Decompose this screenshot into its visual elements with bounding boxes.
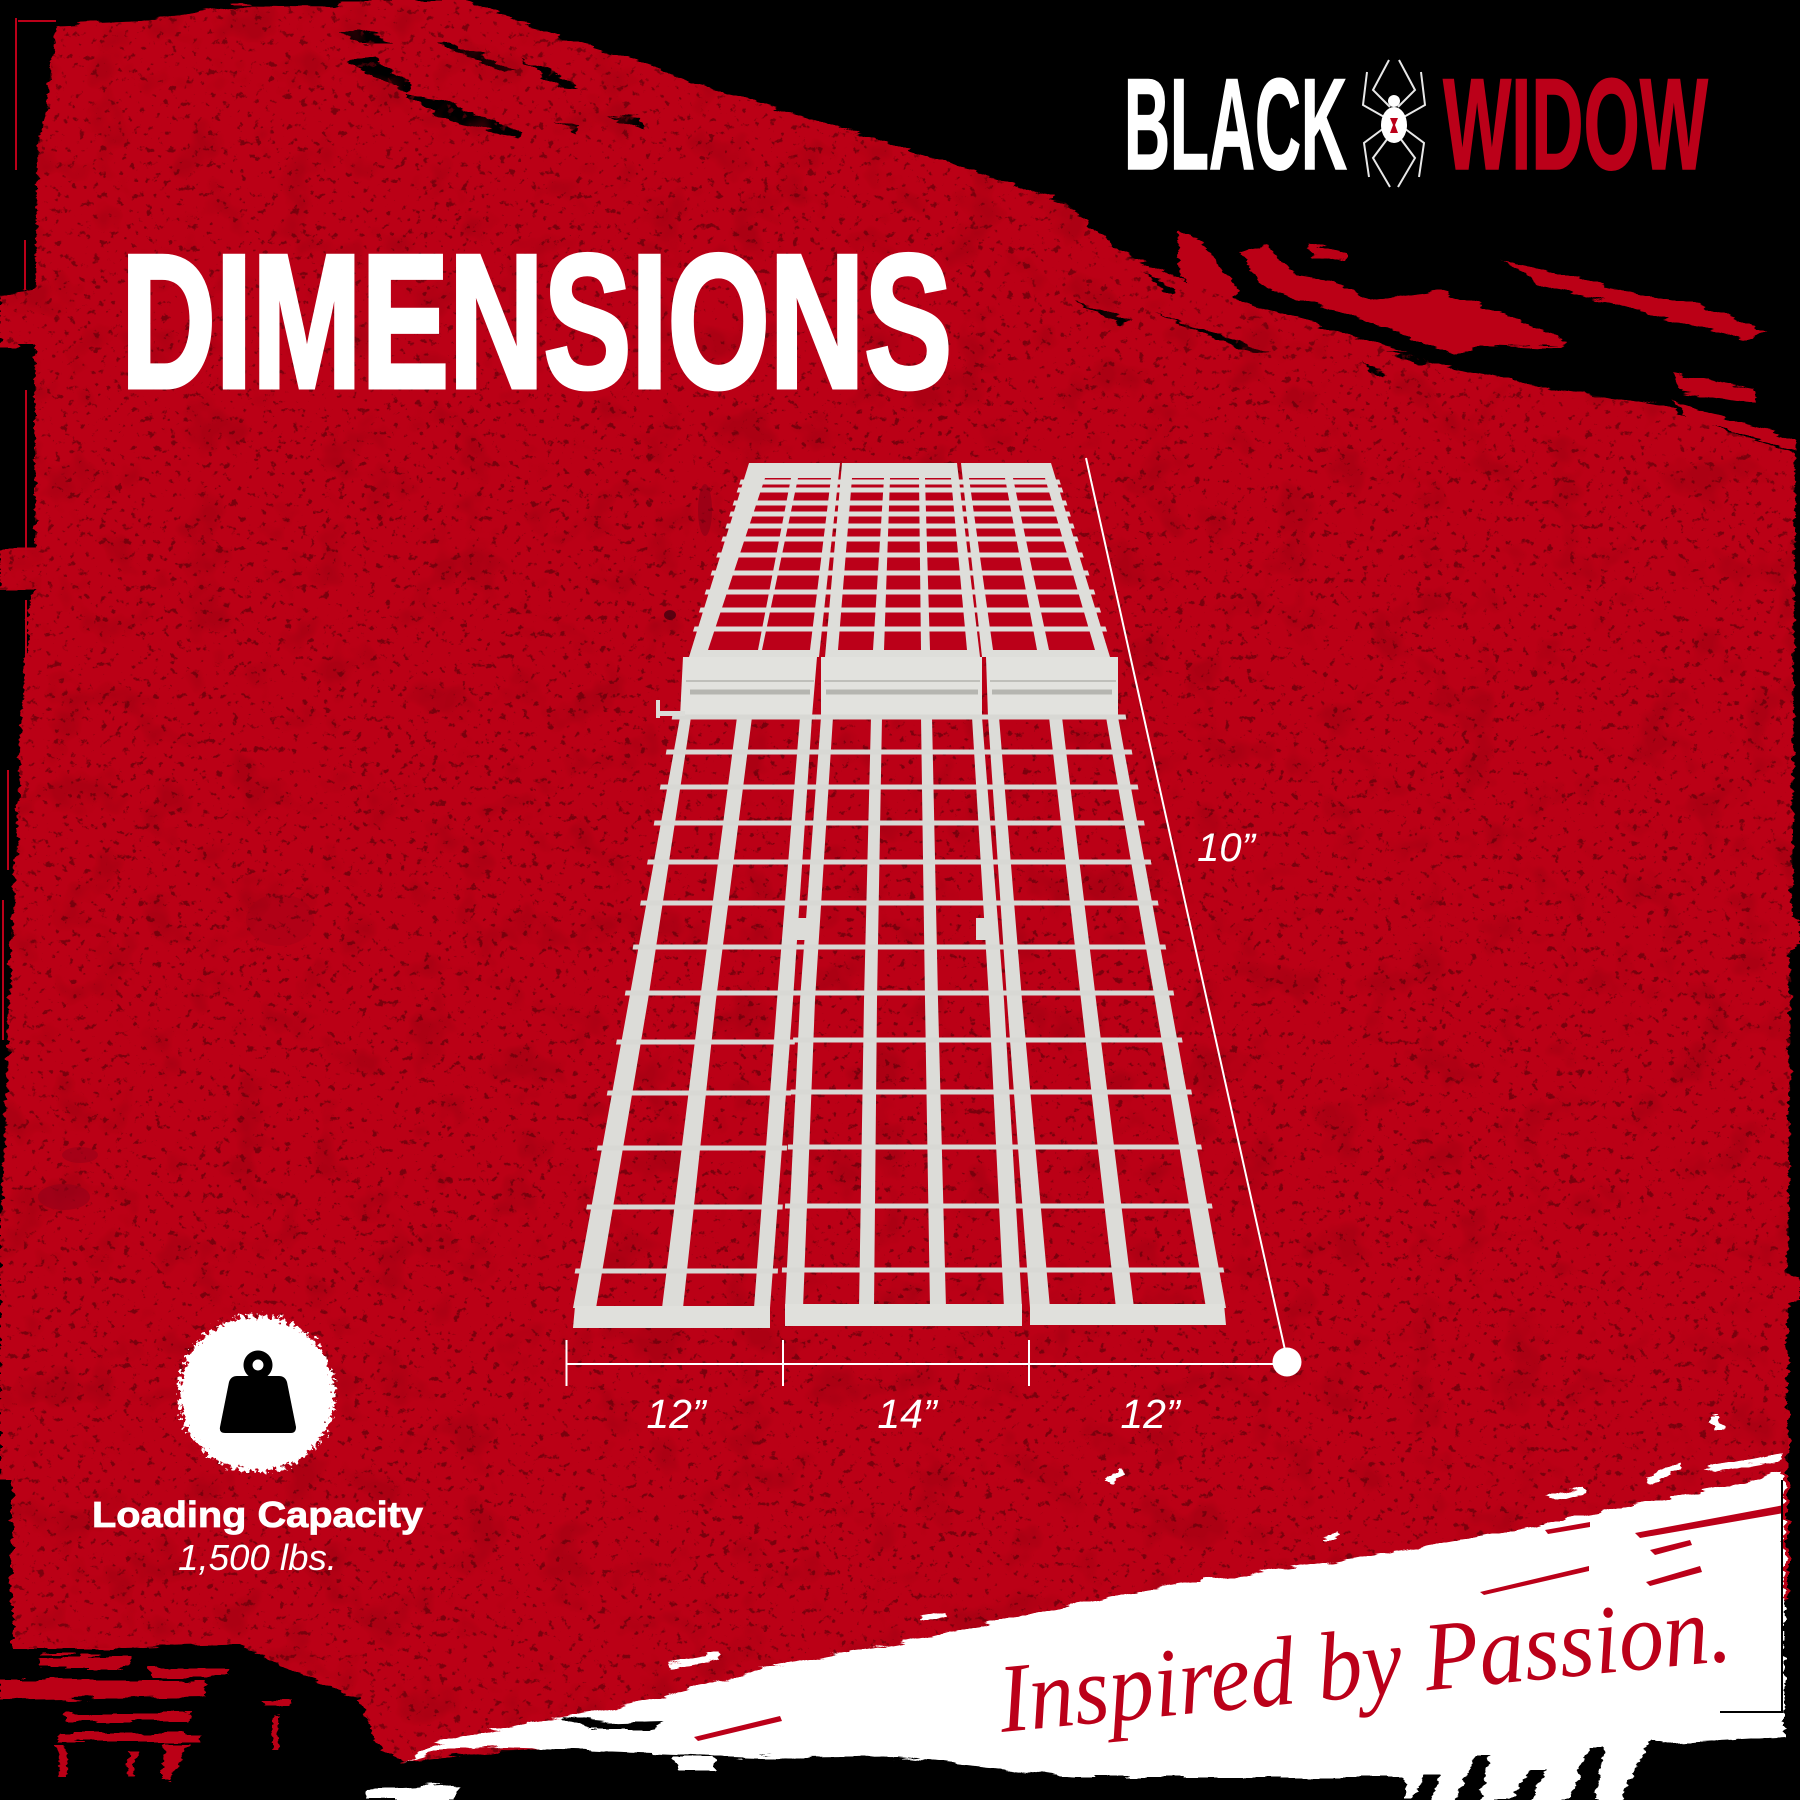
black marks in white swash: [561, 1717, 1662, 1800]
dimension lines: [566, 458, 1286, 1386]
black brush streaks on red: [340, 30, 1440, 378]
title: DIMENSIONS: DIMENSIONS: [121, 216, 952, 428]
width tick marks: [566, 1340, 1029, 1386]
side pin and hinge tabs: [656, 700, 990, 940]
icon: white splat circle: [179, 1316, 335, 1472]
thin black frame at right of swash: [1720, 1480, 1782, 1712]
label: 14 in center width: 14”: [877, 1391, 939, 1437]
label: 12 in left width: 12”: [646, 1391, 708, 1437]
icon: weight: [220, 1350, 296, 1433]
logo: Black Widow: BLACK: [1124, 51, 1347, 197]
upper section cross rungs: [680, 482, 1120, 629]
tagline: Inspired by Passion: Inspired by Passion.: [993, 1575, 1736, 1754]
lower panel center rails: [785, 717, 1022, 1308]
icon: spider: [1363, 60, 1425, 187]
ramp bottom lips: [573, 1304, 1226, 1328]
white brush swash: [367, 1413, 1784, 1800]
ramp center hinge band: [680, 657, 1118, 717]
upper section openings: [708, 478, 1095, 650]
dimension end dot: [1272, 1348, 1302, 1376]
loading capacity text: [92, 1494, 423, 1578]
red thin lines on left black strip: [3, 18, 56, 1040]
loading capacity value: 1,500 lbs.: [178, 1537, 337, 1578]
lower panel right rails: [988, 717, 1226, 1308]
ramp upper section: [689, 463, 1110, 657]
length line: [1086, 458, 1285, 1350]
red streaks in white swash: [694, 1505, 1784, 1741]
product: folding aluminum ramp: [560, 463, 1240, 1328]
width line: [566, 1363, 1286, 1365]
label: 12 in right width: 12”: [1120, 1391, 1182, 1437]
loading capacity heading: Loading Capacity: [92, 1494, 423, 1535]
label: 10 in length: 10”: [1197, 826, 1257, 870]
lower section cross rungs: [560, 717, 1240, 1271]
lower panel left rails: [573, 717, 812, 1308]
